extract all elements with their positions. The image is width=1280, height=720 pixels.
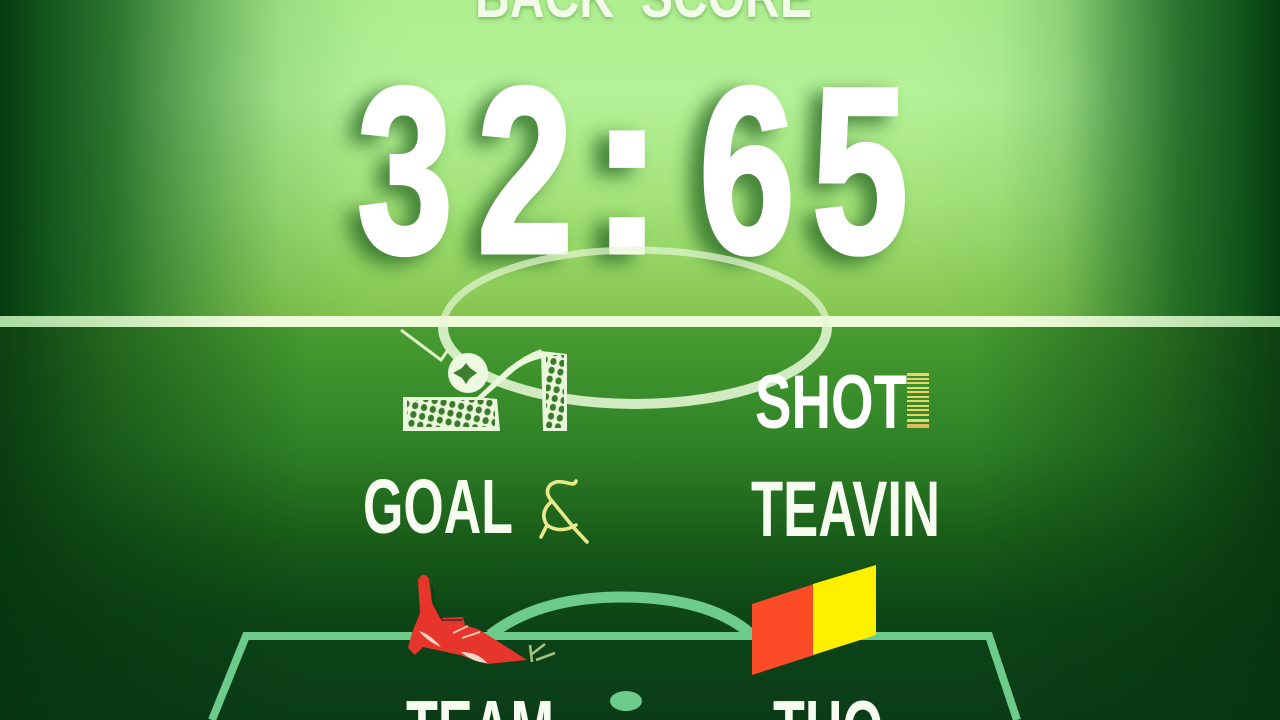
- score: 32 : 65: 5: [812, 38, 908, 302]
- halfway line: [0, 316, 1280, 327]
- score: 32 : 65: 2: [477, 38, 573, 302]
- score shadow: [345, 45, 896, 310]
- crossbar strut: [476, 349, 543, 400]
- score shadow: 2: [465, 45, 561, 309]
- label: goal: GOAL: [363, 464, 513, 550]
- icon: red and yellow card: [752, 565, 876, 675]
- icon: goal with ball: [401, 330, 567, 431]
- kicked turf: [530, 644, 555, 662]
- score: 32 : 65: 6: [699, 38, 795, 302]
- score shadow: 3: [345, 45, 441, 309]
- background: upper side shading: [0, 0, 1280, 322]
- penalty spot: [610, 691, 642, 711]
- icon: yellow ampersand: [541, 481, 587, 542]
- ball: [448, 353, 488, 393]
- center circle: [443, 250, 827, 404]
- icon: red football boot: [408, 575, 555, 664]
- goal post: [541, 351, 567, 431]
- icon: striped bar: [907, 373, 929, 428]
- score: 32 : 65: :: [590, 40, 664, 303]
- score shadow: 5: [800, 45, 896, 309]
- score shadow: 6: [685, 45, 781, 309]
- shot streak: [401, 330, 448, 360]
- background: lower side vignette: [0, 322, 1280, 720]
- label: shot: SHOT: [755, 360, 907, 445]
- score shadow: :: [576, 47, 650, 310]
- background: lower pitch: [0, 322, 1280, 720]
- background: lit upper pitch: [0, 0, 1280, 322]
- score: 32 : 65: 3: [357, 38, 453, 302]
- score: 32 : 65: [357, 38, 908, 303]
- penalty box: [212, 636, 1017, 720]
- label: teavin: TEAVIN: [751, 464, 940, 553]
- goal net base: [403, 397, 500, 431]
- penalty arc: [490, 597, 752, 635]
- labels: team and tho, cropped by the page edge: [406, 684, 883, 720]
